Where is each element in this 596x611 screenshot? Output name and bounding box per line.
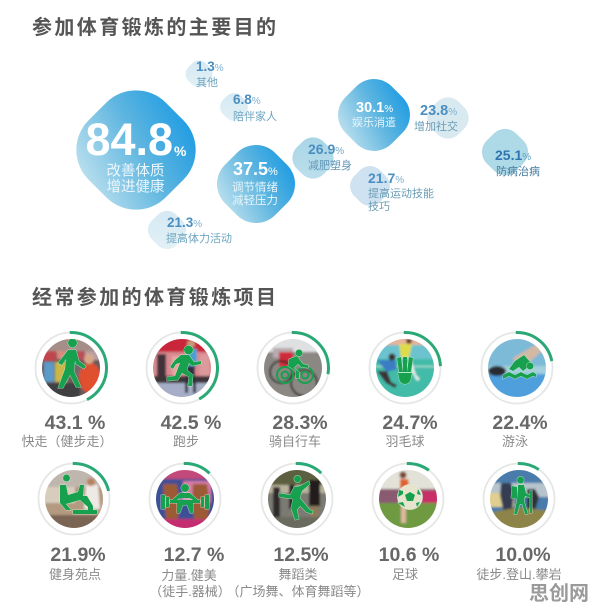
- blob: 6.8% accompany family: 陪伴家人: [233, 109, 277, 123]
- blob: 84.8% improve health: 改善体质: [106, 162, 164, 180]
- item: hiking 10.0%: 徒步.登山.攀岩: [476, 567, 562, 582]
- item: running 42.5%: 42.5 %: [161, 412, 221, 434]
- item: swimming 22.4%: [480, 331, 554, 449]
- item: running 42.5%: [145, 331, 221, 449]
- blob: 21.3% fitness activity: 提高体力活动: [166, 231, 232, 245]
- blob: 21.7% sports skills: 提高运动技能: [368, 186, 434, 200]
- item: strength training 12.7%: （徒手.器械）: [149, 584, 231, 599]
- blob: 37.5% regulate mood: 37.5%: [233, 159, 278, 179]
- item: swimming 22.4%: 游泳: [502, 434, 528, 449]
- item: dance 12.5%: [236, 462, 360, 598]
- item: dance 12.5%: 舞蹈类: [278, 567, 318, 582]
- blob: 30.1% entertainment: 30.1%: [356, 100, 393, 116]
- blob: 37.5% regulate mood: [206, 134, 306, 234]
- item: cycling 28.3%: 骑自行车: [269, 434, 321, 449]
- item: swimming 22.4%: 22.4%: [492, 412, 548, 434]
- item: hiking 10.0%: 10.0%: [495, 544, 551, 566]
- item: fitness park 21.9%: 健身苑点: [49, 567, 101, 582]
- blob: 23.8% social: 增加社交: [414, 119, 458, 133]
- item: football 10.6%: 10.6 %: [379, 544, 439, 566]
- item: badminton 24.7%: 24.7%: [382, 412, 438, 434]
- item: fitness park 21.9%: 21.9%: [50, 544, 106, 566]
- blob: 26.9% weight loss: [286, 131, 352, 185]
- item: football 10.6%: 足球: [392, 567, 418, 582]
- item: running 42.5%: 跑步: [173, 434, 199, 449]
- item: brisk walking 43.1%: [21, 331, 113, 449]
- title: main purposes: 参加体育锻炼的主要目的: [32, 11, 278, 40]
- blob: 30.1% entertainment: [328, 69, 420, 161]
- blob: 25.1% disease prevention: 25.1%: [495, 147, 531, 163]
- blob: 84.8% improve health: %: [174, 143, 187, 159]
- blob: 1.3% other: [182, 57, 224, 91]
- item: strength training 12.7%: [148, 462, 231, 599]
- item: strength training 12.7%: 力量.健美: [161, 568, 217, 583]
- blob: 26.9% weight loss: 26.9%: [308, 141, 344, 157]
- blob: 84.8% improve health: [59, 73, 213, 227]
- item: fitness park 21.9%: [37, 462, 111, 582]
- blob: 37.5% regulate mood: 减轻压力: [232, 193, 278, 207]
- item: hiking 10.0%: [476, 462, 562, 582]
- blob: 84.8% improve health: 增进健康: [106, 178, 164, 196]
- blob: 21.7% sports skills: 技巧: [368, 200, 390, 213]
- blob: 21.7% sports skills: 21.7%: [368, 170, 404, 186]
- blob: 6.8% accompany family: [216, 89, 277, 125]
- blob: 1.3% other: 1.3%: [196, 59, 224, 74]
- blob: 6.8% accompany family: 6.8%: [233, 92, 261, 107]
- blob: 84.8% improve health: 84.8: [86, 114, 173, 165]
- blob: 21.3% fitness activity: [143, 206, 232, 254]
- item: brisk walking 43.1%: 快走（健步走）: [21, 434, 113, 449]
- blob: 25.1% disease prevention: [475, 122, 540, 182]
- item: dance 12.5%: 12.5%: [273, 544, 329, 566]
- blob: 30.1% entertainment: 娱乐消遣: [352, 115, 396, 129]
- item: cycling 28.3%: 28.3%: [272, 412, 328, 434]
- item: brisk walking 43.1%: 43.1 %: [45, 412, 105, 434]
- item: football 10.6%: [371, 462, 445, 582]
- item: badminton 24.7%: [368, 331, 442, 449]
- blob: 23.8% social: 23.8%: [420, 103, 457, 119]
- blob: 25.1% disease prevention: 防病治病: [496, 164, 540, 178]
- item: dance 12.5%: （广场舞、体育舞蹈等）: [226, 584, 370, 599]
- item: cycling 28.3%: [256, 331, 330, 449]
- blob: 1.3% other: 其他: [196, 76, 218, 89]
- blob: 21.3% fitness activity: 21.3%: [167, 215, 202, 230]
- title: common sports: 经常参加的体育锻炼项目: [32, 281, 278, 310]
- item: badminton 24.7%: 羽毛球: [385, 434, 425, 449]
- blob: 37.5% regulate mood: 调节情绪: [232, 180, 278, 194]
- blob: 21.7% sports skills: [344, 160, 434, 213]
- watermark: 思创网: [529, 582, 589, 605]
- blob: 26.9% weight loss: 减肥塑身: [308, 158, 352, 172]
- blob: 23.8% social: [414, 91, 475, 145]
- item: strength training 12.7%: 12.7 %: [164, 544, 224, 566]
